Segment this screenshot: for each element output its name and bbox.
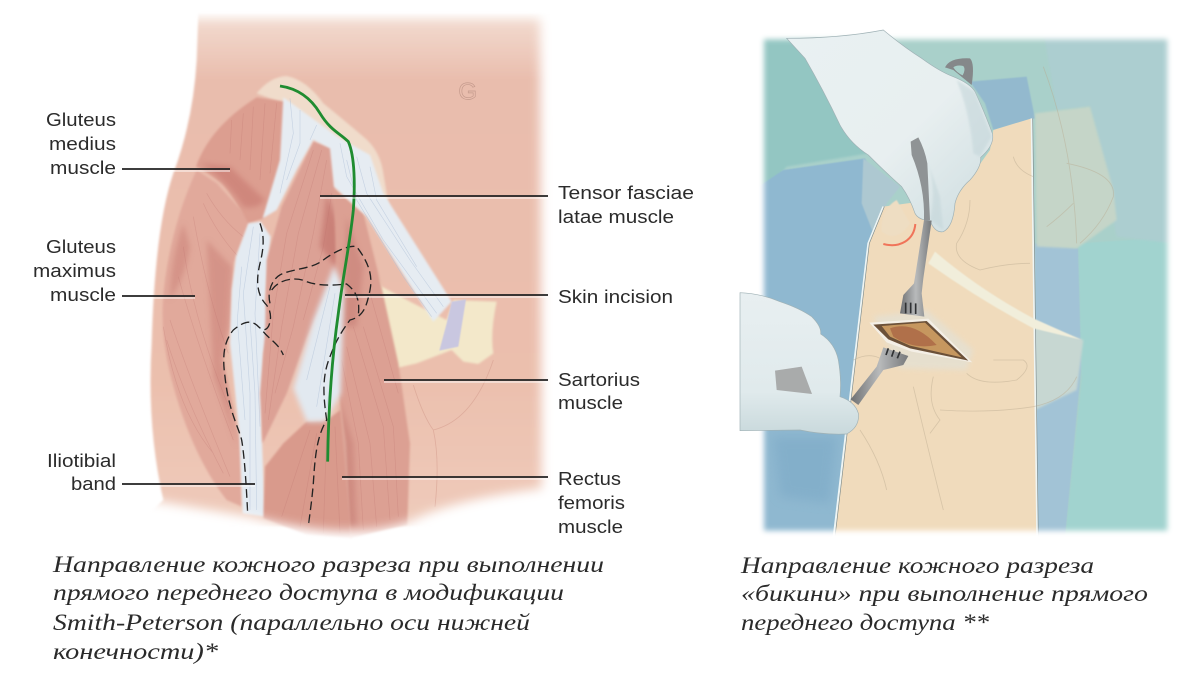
lower retractor	[851, 347, 908, 405]
green skin incision line	[280, 86, 354, 462]
upper glove hand	[787, 30, 993, 232]
tendon from anterior iliac spine	[263, 97, 452, 322]
lower glove hand	[740, 293, 859, 434]
illustration: bikini incision surgery	[740, 30, 1180, 540]
left blue drape	[762, 158, 872, 532]
tensor fasciae latae muscle	[258, 142, 336, 442]
illustration: hip muscle anatomy	[137, 13, 560, 538]
lateral muscle fibers	[342, 293, 398, 530]
iliac crest bone	[257, 76, 388, 200]
label: gluteus maximus muscle: muscle	[50, 285, 116, 305]
caption: left illustration: Направление кожного разреза при выполнении	[52, 552, 604, 577]
caption: right illustration: «бикини» при выполнение прямого	[741, 581, 1148, 606]
femur head and joint	[380, 284, 497, 368]
gluteus maximus fibers	[163, 193, 243, 477]
caption: right illustration: переднего доступа **	[741, 610, 990, 635]
right teal drape	[1065, 237, 1180, 540]
caption: left illustration: конечности)*	[53, 639, 219, 664]
red skin mark arc	[883, 224, 915, 245]
translucent blur around incision	[873, 310, 973, 370]
gluteus maximus shading	[170, 228, 234, 430]
dashed surgical planes	[224, 223, 371, 527]
right pelvis translucent	[1035, 323, 1083, 410]
anatomy sketch lines	[853, 67, 1114, 510]
incision wound	[869, 319, 972, 362]
tensor shading	[318, 199, 336, 265]
leader lines	[122, 169, 548, 486]
fascia fibers	[307, 287, 337, 410]
right blue strip	[1035, 243, 1082, 540]
top blue drape	[970, 77, 1035, 130]
label: rectus femoris muscle: muscle	[558, 517, 623, 537]
sartorius lateral muscle	[334, 188, 410, 538]
upper left teal drape	[763, 38, 866, 182]
joint capsule	[439, 299, 466, 351]
letter mark G: G	[458, 78, 477, 105]
label: skin incision: Skin incision	[558, 287, 673, 307]
label: sartorius muscle: muscle	[558, 393, 623, 413]
translucent drape by hand	[862, 158, 900, 233]
rectus femoris muscle	[263, 410, 352, 538]
label: iliotibial band: band	[71, 474, 116, 494]
gluteus medius fibers	[230, 103, 277, 180]
left blue shade	[778, 440, 832, 499]
rectus fibers	[282, 427, 340, 533]
label: gluteus maximus muscle: Gluteus	[46, 237, 116, 257]
label: tensor fasciae latae muscle: latae muscle	[558, 207, 674, 227]
label: tensor fasciae latae muscle: Tensor fasciae	[558, 183, 694, 203]
label: gluteus medius muscle: Gluteus	[46, 110, 116, 130]
rectus fascia white	[293, 266, 344, 422]
iliotibial band	[230, 222, 271, 517]
upper retractor	[900, 220, 932, 317]
upper glove thumb gap	[911, 137, 930, 220]
label: rectus femoris muscle: Rectus	[558, 469, 621, 489]
caption: right illustration: Направление кожного разреза	[740, 553, 1094, 578]
label: gluteus maximus muscle: maximus	[33, 261, 116, 281]
label: gluteus medius muscle: medius	[49, 134, 116, 154]
tendon fibers	[280, 98, 443, 317]
lower glove finger gap	[775, 367, 812, 394]
retractor ring	[945, 58, 973, 85]
label: sartorius muscle: Sartorius	[558, 370, 640, 390]
tensor fibers	[265, 150, 332, 420]
lateral muscle shading	[340, 217, 363, 527]
label: gluteus medius muscle: muscle	[50, 158, 116, 178]
caption: left illustration: прямого переднего доступа в модификации	[53, 580, 564, 605]
thigh fold line	[413, 360, 493, 507]
skin window edges	[833, 118, 1037, 540]
gluteus medius shading	[200, 163, 265, 207]
beige exposed skin	[833, 118, 1037, 540]
label: iliotibial band: Iliotibial	[47, 451, 116, 471]
label: rectus femoris muscle: femoris	[558, 493, 625, 513]
skin silhouette	[137, 13, 560, 527]
upper right greyed drape	[1150, 238, 1165, 241]
iliotibial band fibers	[237, 227, 260, 510]
caption: left illustration: Smith-Peterson (параллельно оси нижней	[53, 610, 531, 635]
right upper translucent drape	[1035, 107, 1117, 248]
gluteus maximus muscle	[163, 170, 250, 507]
white ligament band	[928, 252, 1082, 340]
skin window dark edges	[835, 118, 1038, 540]
iliac crest bump	[882, 200, 910, 236]
drape background	[782, 36, 1144, 532]
gluteus medius muscle	[196, 97, 285, 223]
upper glove shading	[928, 80, 992, 230]
